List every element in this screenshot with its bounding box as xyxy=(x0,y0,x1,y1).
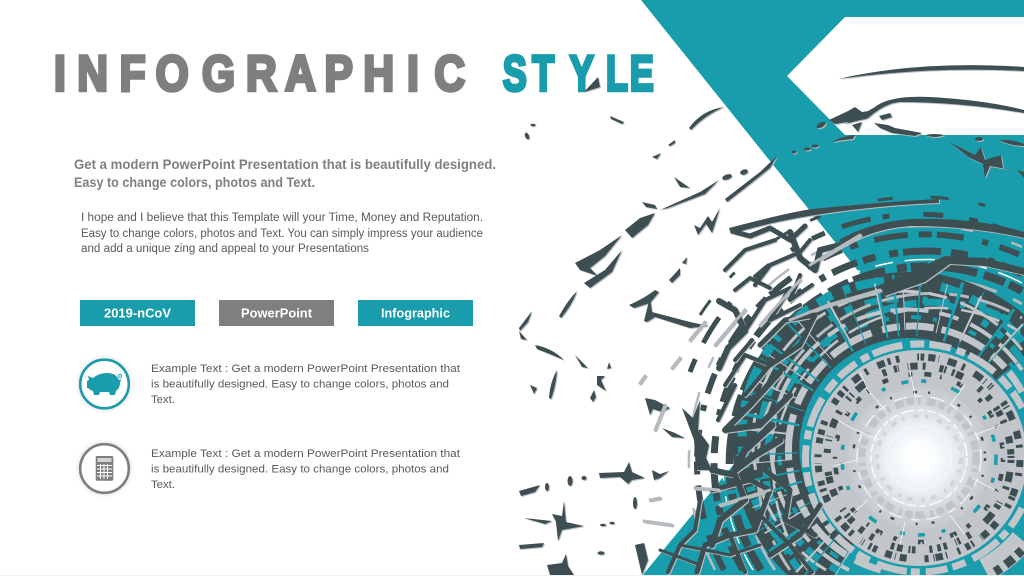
example text 1: is beautifully designed. Easy to change colors, photos and xyxy=(151,378,449,390)
body paragraph: I hope and I believe that this Template will your Time, Money and Reputation. xyxy=(81,212,483,224)
dark ring band xyxy=(742,281,1022,572)
bottom edge xyxy=(0,575,1024,576)
example text 2: Text. xyxy=(151,479,175,491)
example text 1 xyxy=(151,363,461,406)
background teal chevron shape xyxy=(641,0,1024,576)
icon: piggy bank xyxy=(75,354,134,414)
tag: Infographic: Infographic xyxy=(381,306,450,320)
shattered glass graphic xyxy=(519,65,1024,575)
example text 2 xyxy=(151,448,461,491)
body paragraph: Easy to change colors, photos and Text. You can simply impress your audience xyxy=(81,228,483,240)
outer cracks on teal and white xyxy=(689,197,1022,570)
title: STYLE xyxy=(503,47,654,102)
subheading: Easy to change colors, photos and Text. xyxy=(74,174,315,190)
example text 1: Example Text : Get a modern PowerPoint Presentation that xyxy=(151,363,461,375)
tag: Infographic xyxy=(358,300,473,326)
gray inner disc xyxy=(811,350,1024,566)
subheading xyxy=(74,156,496,190)
dense dark shard cluster xyxy=(640,226,880,572)
example text 2: Example Text : Get a modern PowerPoint Presentation that xyxy=(151,448,461,460)
title: INFOGRAPHIC xyxy=(54,45,465,101)
radial breaks through the ring band xyxy=(766,305,1022,572)
tag: 2019-nCoV: 2019-nCoV xyxy=(104,306,171,320)
tag: PowerPoint xyxy=(219,300,334,326)
body paragraph xyxy=(81,212,483,255)
bright impact core xyxy=(847,386,991,530)
example text 1: Text. xyxy=(151,394,175,406)
icon: calculator xyxy=(75,439,134,498)
body paragraph: and add a unique zing and appeal to your Presentations xyxy=(81,243,369,255)
dark shards xyxy=(519,65,1024,575)
core mottling xyxy=(853,392,985,524)
example text 2: is beautifully designed. Easy to change colors, photos and xyxy=(151,464,449,476)
gray ragged disc edge xyxy=(806,344,1022,572)
white hairline cracks xyxy=(833,372,1000,545)
title xyxy=(54,45,654,102)
tag: PowerPoint: PowerPoint xyxy=(241,306,313,320)
subheading: Get a modern PowerPoint Presentation that is beautifully designed. xyxy=(74,156,496,172)
tag: 2019-nCoV xyxy=(80,300,195,326)
lower right fragments xyxy=(985,540,1022,572)
inner dark fragments xyxy=(818,357,1020,559)
